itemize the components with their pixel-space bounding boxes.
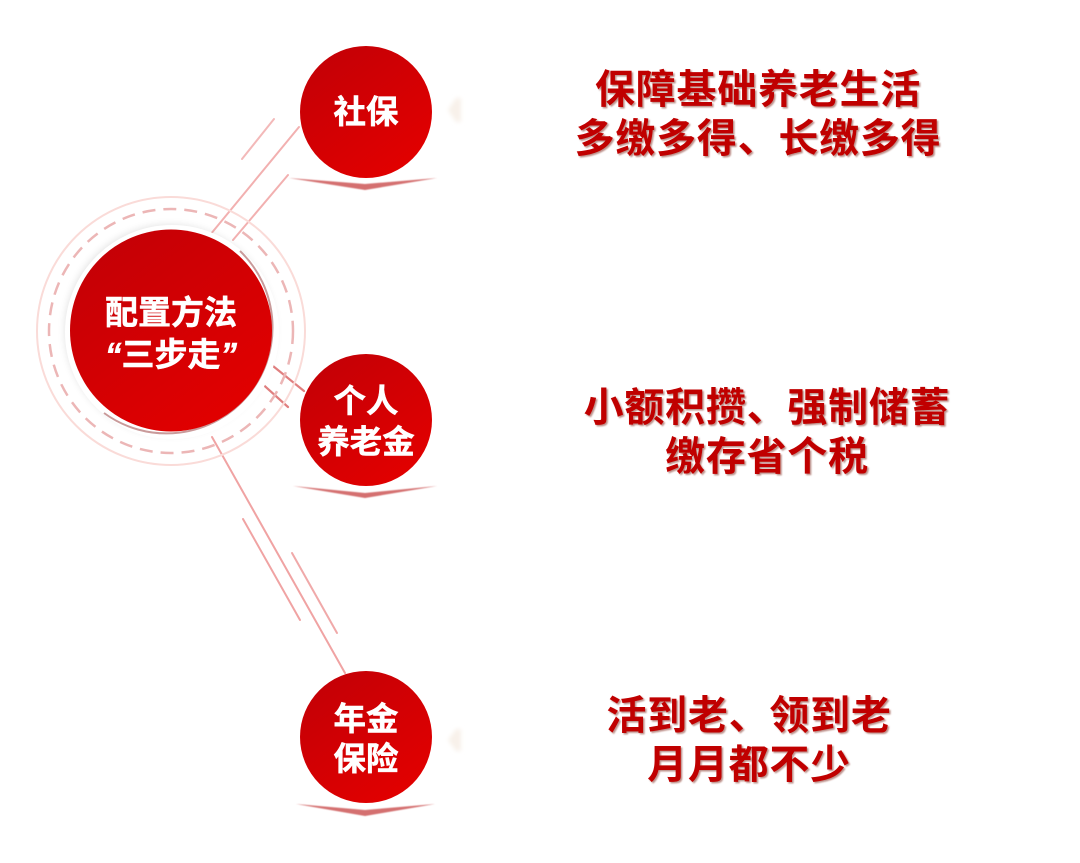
node: 年金保险: 年金	[333, 701, 399, 737]
node: 社保: 社保	[333, 94, 399, 130]
pale diamond marker: row 1	[448, 98, 461, 122]
pale diamond marker: row 3	[448, 729, 461, 751]
hub label: “三步走”	[105, 336, 238, 373]
connector lines: center to social insurance	[210, 119, 299, 240]
chevron	[293, 486, 437, 498]
node: 社保	[289, 46, 437, 190]
connector lines: center to annuity insurance	[212, 437, 345, 673]
text block: 社保 description: 保障基础养老生活	[595, 68, 921, 112]
text block: 年金保险 description: 月月都不少	[647, 743, 851, 787]
central hub: 配置方法 三步走	[37, 197, 305, 465]
text block: 个人养老金 description: 缴存省个税	[665, 435, 869, 479]
text block: 年金保险 description	[606, 694, 892, 787]
node: 年金保险	[296, 671, 435, 816]
text block: 社保 description	[575, 68, 941, 161]
chevron	[296, 804, 435, 816]
connector lines: center to personal pension	[258, 362, 304, 407]
hub label	[105, 294, 238, 373]
node: 个人养老金	[293, 354, 437, 498]
node: 个人养老金: 个人	[333, 383, 399, 419]
text block: 个人养老金 description: 小额积攒、强制储蓄	[584, 386, 950, 430]
node: 个人养老金: 养老金	[317, 424, 415, 460]
node: 年金保险: 保险	[333, 741, 399, 777]
chevron	[289, 178, 437, 190]
text block: 年金保险 description: 活到老、领到老	[606, 694, 892, 738]
hub label: 配置方法	[105, 294, 237, 331]
text block: 社保 description: 多缴多得、长缴多得	[575, 117, 941, 161]
text block: 个人养老金 description	[584, 386, 950, 479]
